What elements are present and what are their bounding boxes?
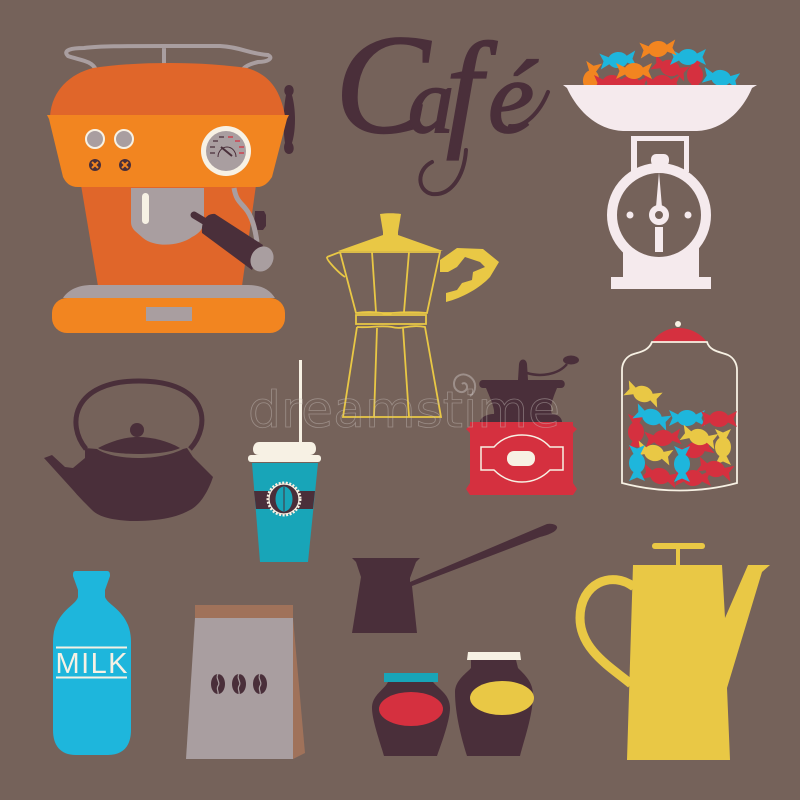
coffee beans	[211, 674, 267, 694]
pot body	[627, 565, 770, 760]
grinder bowl	[479, 380, 565, 422]
candies in bowl	[580, 39, 740, 99]
title: Café lettering	[335, 5, 548, 194]
grinder handle knob	[563, 356, 579, 364]
grey buttons	[86, 130, 133, 148]
icon: kitchen scale with candies	[563, 39, 757, 289]
label rules	[56, 648, 127, 678]
watermark text: dreamstime	[248, 381, 560, 439]
teapot lid	[98, 437, 180, 454]
teapot body	[44, 448, 213, 521]
bag side	[293, 618, 305, 759]
yellow label	[470, 681, 534, 715]
icon: jam jar red	[372, 673, 450, 756]
MILK label: MILK	[56, 648, 128, 680]
word Café: f	[446, 17, 498, 161]
cup rim	[248, 455, 321, 462]
icon: coffee bag	[186, 605, 305, 759]
small dials	[89, 159, 131, 171]
scale base	[611, 240, 711, 289]
scale dots	[626, 212, 692, 218]
red label	[379, 692, 443, 726]
teapot lid knob	[130, 423, 144, 437]
handle end cap	[246, 242, 278, 276]
machine side lever	[284, 85, 295, 154]
white lid	[467, 652, 521, 660]
icon: candy jar	[622, 321, 737, 490]
pressure gauge	[201, 126, 251, 176]
icon: jam jar yellow	[455, 652, 534, 756]
bag front	[186, 618, 293, 759]
teal lid	[384, 673, 438, 682]
bottle shape	[53, 571, 131, 755]
machine control band	[47, 115, 289, 187]
icon: moka pot	[327, 213, 499, 417]
dark handle	[194, 215, 214, 227]
straw	[299, 360, 302, 443]
scale frame	[631, 136, 689, 172]
cup band	[254, 491, 315, 509]
grinder handle	[527, 364, 567, 375]
icon: teapot	[44, 381, 213, 521]
cup lid	[253, 442, 316, 455]
white highlight bar	[142, 193, 149, 224]
icon: milk bottle	[53, 571, 131, 755]
cup body	[252, 463, 318, 562]
teapot ring handle	[76, 381, 202, 449]
tray plate	[146, 307, 192, 321]
pot handle	[580, 580, 634, 684]
jar body	[372, 682, 450, 756]
scale dial	[612, 168, 706, 262]
bag top fold	[195, 605, 293, 618]
jar candies	[623, 380, 737, 488]
grinder shaft	[518, 360, 528, 380]
grinder label	[481, 435, 563, 482]
handle grip	[202, 214, 263, 270]
watermark spiral	[454, 374, 475, 396]
icon: espresso machine	[47, 46, 295, 333]
icon: coffee grinder	[466, 356, 579, 495]
watermark	[248, 374, 560, 439]
word Café: a	[408, 50, 454, 152]
moka lid	[338, 213, 443, 251]
lettering flourishes	[420, 92, 548, 194]
moka outline	[327, 252, 441, 417]
jar body	[455, 660, 533, 756]
pot lid knob	[652, 543, 705, 565]
word Café: C	[335, 5, 432, 163]
machine top rail	[66, 46, 270, 73]
scale knob	[651, 154, 669, 166]
word Café: é	[488, 40, 538, 155]
machine upper cap	[50, 63, 285, 116]
drip tray base	[52, 298, 285, 333]
scale bowl	[563, 85, 757, 131]
icon: coffee pot	[580, 543, 770, 760]
steam knob	[254, 211, 266, 230]
machine body	[81, 185, 256, 286]
icon: cezve	[352, 524, 557, 633]
drip tray top	[63, 285, 275, 298]
grinder drawer pill	[507, 451, 535, 466]
grinder box	[466, 422, 577, 495]
jar lid	[652, 328, 707, 342]
jar outline	[622, 342, 737, 490]
portafilter head	[131, 188, 204, 245]
icon: takeaway coffee cup	[248, 360, 321, 562]
scale needle	[655, 172, 663, 252]
moka handle	[440, 248, 499, 302]
jar lid knob	[675, 321, 681, 327]
scale hub	[652, 208, 666, 222]
steam wand	[234, 188, 257, 242]
cup badge	[268, 483, 300, 515]
